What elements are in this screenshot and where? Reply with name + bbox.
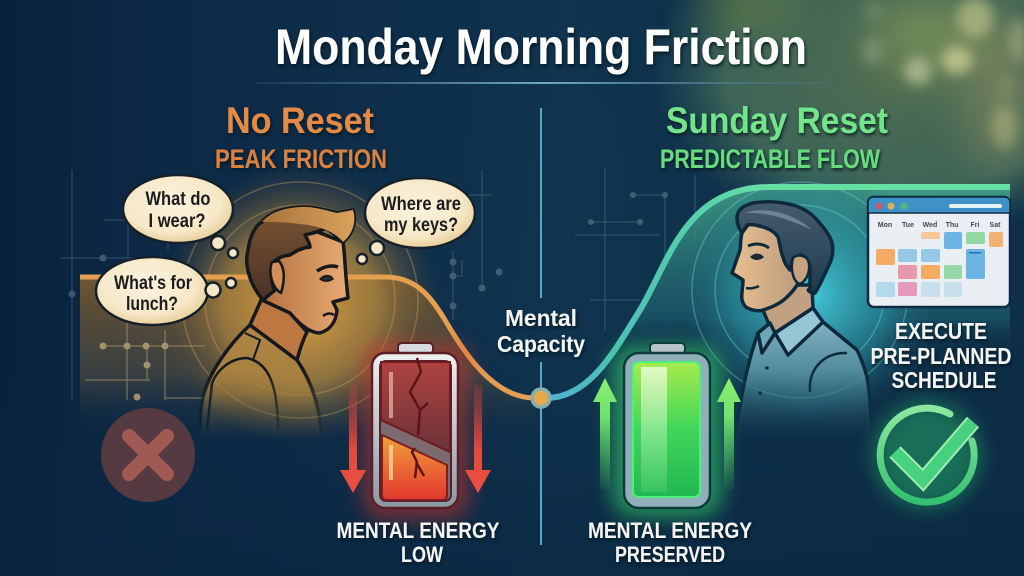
arrow: up right xyxy=(717,378,741,490)
man: sunday reset xyxy=(732,202,872,440)
curve node xyxy=(532,389,550,407)
icon: full battery xyxy=(612,343,722,517)
curve: orange mental capacity line xyxy=(80,277,535,398)
orange glow panel: no reset xyxy=(80,165,535,445)
calendar: Fri xyxy=(971,222,980,229)
thought bubble: what's for lunch: What's for xyxy=(114,273,193,294)
man: no reset xyxy=(200,207,354,440)
label: execute pre-planned schedule xyxy=(870,318,1012,393)
heading: no reset: No Reset xyxy=(226,100,374,141)
right circuit pattern xyxy=(575,168,695,330)
label: mental energy preserved: PRESERVED xyxy=(615,542,725,567)
label: mental capacity: Mental xyxy=(505,305,577,331)
icon: red x xyxy=(101,408,195,502)
label: mental energy preserved: MENTAL ENERGY xyxy=(588,518,752,543)
label: execute pre-planned schedule: SCHEDULE xyxy=(892,367,996,393)
label: mental capacity: Capacity xyxy=(497,331,585,357)
label: mental energy low: LOW xyxy=(401,542,443,567)
title rule xyxy=(256,82,832,84)
thought bubble: where are my keys: my keys? xyxy=(384,215,458,236)
thought bubble: where are my keys: Where are xyxy=(381,194,461,215)
calendar xyxy=(868,197,1010,307)
thought bubble: what do I wear: What do xyxy=(146,189,210,210)
thought bubble: where are my keys xyxy=(357,178,475,264)
label: mental energy low: MENTAL ENERGY xyxy=(336,518,500,543)
label: mental energy low xyxy=(336,518,500,567)
arrow: down right xyxy=(465,385,491,493)
icon: green check xyxy=(873,401,981,509)
curve: green mental capacity line xyxy=(546,187,1010,398)
divider line xyxy=(540,108,542,545)
calendar: Tue xyxy=(902,222,914,229)
label: execute pre-planned schedule: EXECUTE xyxy=(895,318,987,344)
label: mental energy preserved xyxy=(588,518,752,567)
calendar: Wed xyxy=(923,222,937,229)
calendar: Thu xyxy=(946,222,958,229)
label: mental capacity xyxy=(497,305,585,357)
thought bubble: what do I wear: I wear? xyxy=(148,211,206,232)
thought bubble: what do I wear xyxy=(123,175,238,258)
thought bubble: what's for lunch: lunch? xyxy=(126,294,178,315)
subheading: predictable flow: PREDICTABLE FLOW xyxy=(660,144,880,174)
left circuit pattern xyxy=(60,170,502,400)
thought bubble: what's for lunch xyxy=(96,257,236,325)
heading: sunday reset: Sunday Reset xyxy=(666,100,888,141)
calendar: Sat xyxy=(990,222,1001,229)
title: Monday Morning Friction xyxy=(275,19,807,75)
teal glow panel: sunday reset xyxy=(546,165,1010,450)
arrow: up left xyxy=(593,378,617,490)
icon: cracked battery xyxy=(362,342,470,520)
arrow: down left xyxy=(340,385,366,493)
subheading: peak friction: PEAK FRICTION xyxy=(215,144,387,174)
calendar: Mon xyxy=(878,222,892,229)
